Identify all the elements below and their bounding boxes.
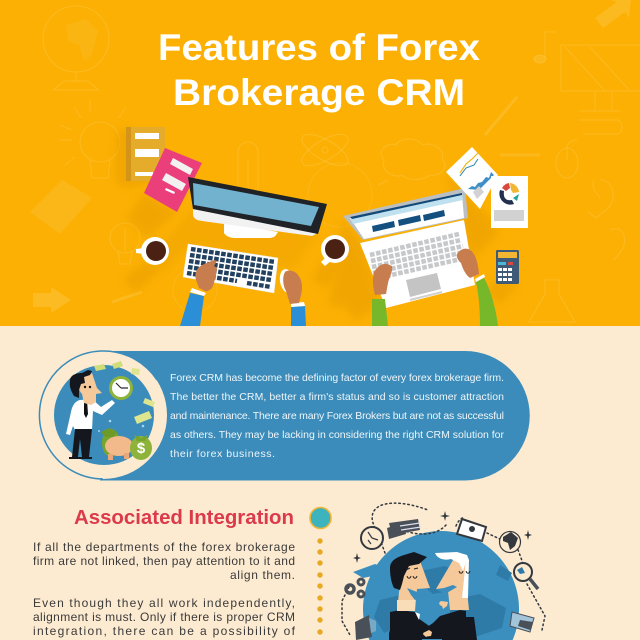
- intro paragraph: [170, 372, 504, 460]
- illustration: handshake over globe: [342, 503, 545, 640]
- icon: donut chart paper: [491, 176, 528, 228]
- icon: desktop monitor: [188, 177, 327, 238]
- icon: yellow book: [126, 127, 165, 181]
- desk shadows: [116, 127, 518, 320]
- intro paragraph: The better the CRM, better a firm's status and so is customer attraction: [170, 391, 504, 403]
- panel: header banner: [0, 0, 640, 326]
- body text: associated integration: align them.: [230, 568, 295, 582]
- intro paragraph: as others. They may be lacking in considering the right CRM solution for: [170, 429, 504, 441]
- sparkles: [353, 511, 532, 563]
- icon: keyboard: [183, 244, 278, 293]
- icon: gears: [346, 579, 364, 597]
- icon: lower right documents: [510, 612, 534, 632]
- icon: magnifier: [514, 563, 538, 589]
- laptop left hand and sleeve: [372, 264, 392, 326]
- laptop right hand and sleeve: [457, 249, 498, 326]
- body text: associated integration: firm are not linked, then pay attention to it and: [33, 554, 295, 568]
- intro paragraph: and maintenance. There are many Forex Brokers but are not as successful: [170, 410, 504, 422]
- panel: intro pill: [39, 351, 530, 480]
- title: Features of Forex: [158, 27, 480, 68]
- left arm and hand: [180, 260, 217, 326]
- icon: laptop: [343, 188, 475, 308]
- body text: associated integration: integration, there can be a possibility of: [33, 624, 296, 638]
- icon: tablet: [457, 519, 486, 541]
- icon: small globe: [500, 532, 520, 552]
- icon: clock: [361, 527, 383, 549]
- illustration: businessman with money: [66, 361, 155, 460]
- right arm and hand: [283, 271, 306, 326]
- dotted network path: [342, 503, 545, 635]
- heading: Associated Integration: Associated Integration: [74, 507, 294, 529]
- timeline marker: [310, 508, 331, 635]
- globe: [353, 531, 519, 640]
- icon: lower left documents: [355, 615, 376, 640]
- illustration: businessman with money: $: [137, 440, 146, 457]
- body text: associated integration: If all the departments of the forex brokerage: [33, 540, 295, 554]
- title: [158, 27, 480, 113]
- body text: associated integration: [33, 540, 296, 638]
- body text: associated integration: alignment is must. Only if there is proper CRM: [33, 610, 295, 624]
- background doodle icons: [30, 6, 640, 322]
- icon ring: [39, 351, 167, 479]
- title: Brokerage CRM: [173, 72, 465, 113]
- right coffee cup: [321, 235, 349, 266]
- intro paragraph: their forex business.: [170, 448, 275, 460]
- icon: pink book: [144, 148, 202, 212]
- body text: associated integration: Even though they all work independently,: [33, 596, 295, 610]
- icon: documents: [387, 519, 421, 539]
- left businessman: [389, 552, 448, 640]
- intro paragraph: Forex CRM has become the defining factor of every forex brokerage firm.: [170, 372, 504, 384]
- icon: calculator: [496, 250, 519, 284]
- icon: mouse: [278, 268, 296, 294]
- right businessman: [412, 552, 477, 640]
- icon: left coffee cup: [136, 237, 169, 265]
- icon: chart paper: [446, 147, 498, 209]
